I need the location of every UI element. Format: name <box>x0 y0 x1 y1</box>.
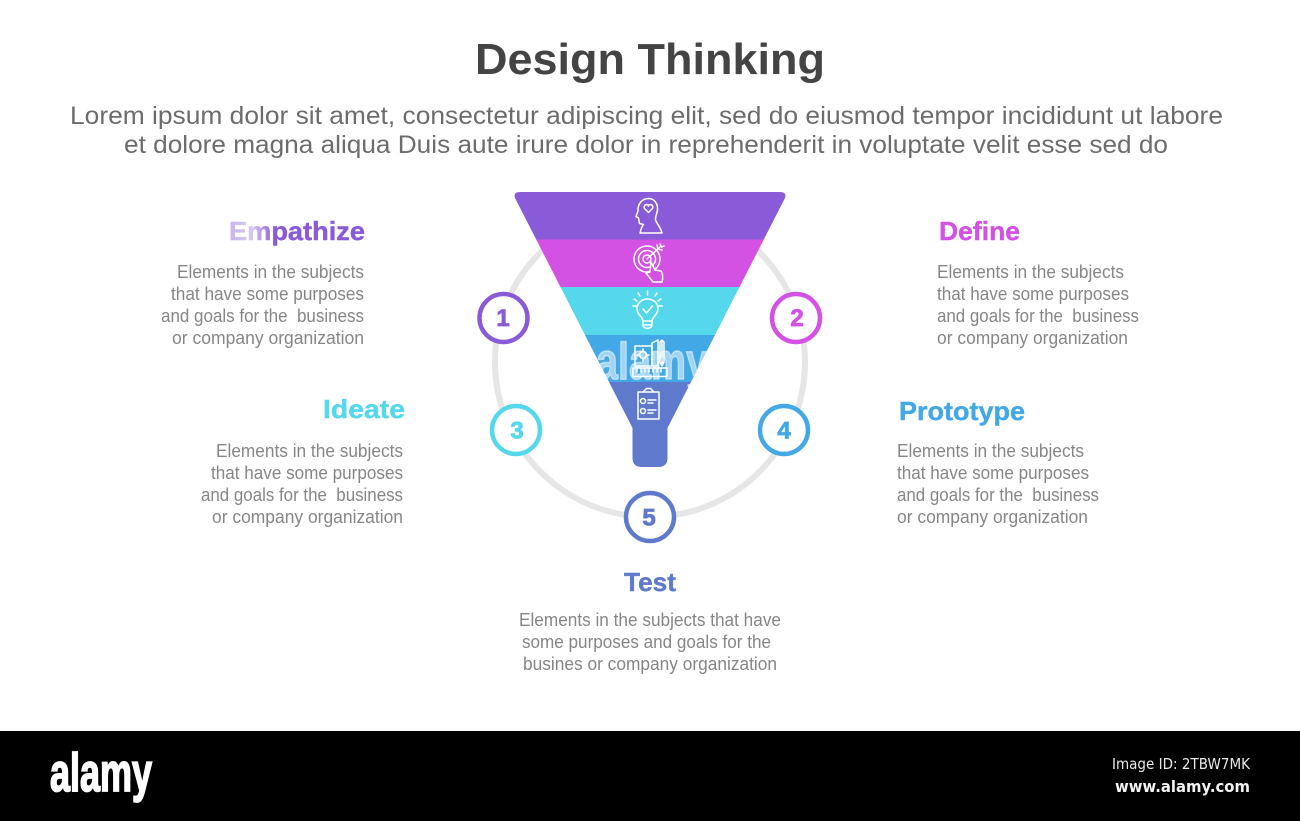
website: www.alamy.com <box>1115 777 1250 796</box>
panel: empathize <box>161 216 365 348</box>
subtitle: Lorem ipsum dolor sit amet, consectetur adipiscing elit, sed do eiusmod tempor incididunt ut labore <box>70 102 1223 130</box>
panel: empathize: and goals for the business <box>161 306 364 326</box>
panel: empathize: or company organization <box>172 328 364 348</box>
icon: clipboard checklist <box>638 388 659 419</box>
badge 4: 4 <box>777 418 791 444</box>
badge 3: 3 <box>510 418 524 444</box>
footer bar <box>0 731 1300 821</box>
badge 1: 1 <box>496 305 510 332</box>
panel: prototype: Elements in the subjects <box>897 441 1084 461</box>
panel: ideate: Elements in the subjects <box>216 441 403 461</box>
icon: target with hand <box>634 244 664 282</box>
panel: ideate: Ideate <box>323 394 405 424</box>
panel: prototype <box>897 396 1099 527</box>
panel: prototype: Prototype <box>899 396 1025 426</box>
badge 1 <box>480 294 528 342</box>
panel: ideate: or company organization <box>212 507 403 527</box>
panel: prototype: or company organization <box>897 507 1088 527</box>
panel: ideate: and goals for the business <box>201 485 403 505</box>
panel: define: or company organization <box>937 328 1128 348</box>
badge 4 <box>760 406 808 454</box>
icon: light bulb <box>633 291 662 328</box>
panel: prototype: and goals for the business <box>897 485 1099 505</box>
title: Design Thinking <box>475 35 825 84</box>
panel: test <box>519 567 781 674</box>
panel: test: some purposes and goals for the <box>522 632 771 652</box>
panel: define: that have some purposes <box>937 284 1129 304</box>
badge 2 <box>772 294 820 342</box>
panel: ideate: that have some purposes <box>211 463 403 483</box>
image id: Image ID: 2TBW7MK <box>1112 755 1251 773</box>
panel: define: Elements in the subjects <box>937 262 1124 282</box>
panel: define: Define <box>939 216 1020 246</box>
subtitle: et dolore magna aliqua Duis aute irure dolor in reprehenderit in voluptate velit esse sed do <box>124 131 1168 159</box>
badge 3 <box>492 406 540 454</box>
icon: design tools <box>633 340 667 376</box>
panel: test: Elements in the subjects that have <box>519 610 781 630</box>
icon: head with heart <box>636 198 662 233</box>
subtitle <box>70 102 1223 159</box>
panel: empathize: Empathize <box>229 216 365 246</box>
panel: prototype: that have some purposes <box>897 463 1089 483</box>
panel: define <box>937 216 1139 348</box>
badge 2: 2 <box>790 305 804 332</box>
panel: empathize: that have some purposes <box>171 284 364 304</box>
funnel <box>514 192 786 467</box>
panel: ideate <box>201 394 405 527</box>
badge 5: 5 <box>642 504 656 532</box>
panel: test: busines or company organization <box>523 654 777 674</box>
panel: test: Test <box>624 567 676 597</box>
badge 5 <box>626 493 674 541</box>
panel: empathize: Elements in the subjects <box>177 262 364 282</box>
footer logo: alamy <box>50 743 152 803</box>
watermark on funnel: alamy <box>596 333 708 391</box>
panel: define: and goals for the business <box>937 306 1139 326</box>
ring behind funnel <box>495 207 805 517</box>
